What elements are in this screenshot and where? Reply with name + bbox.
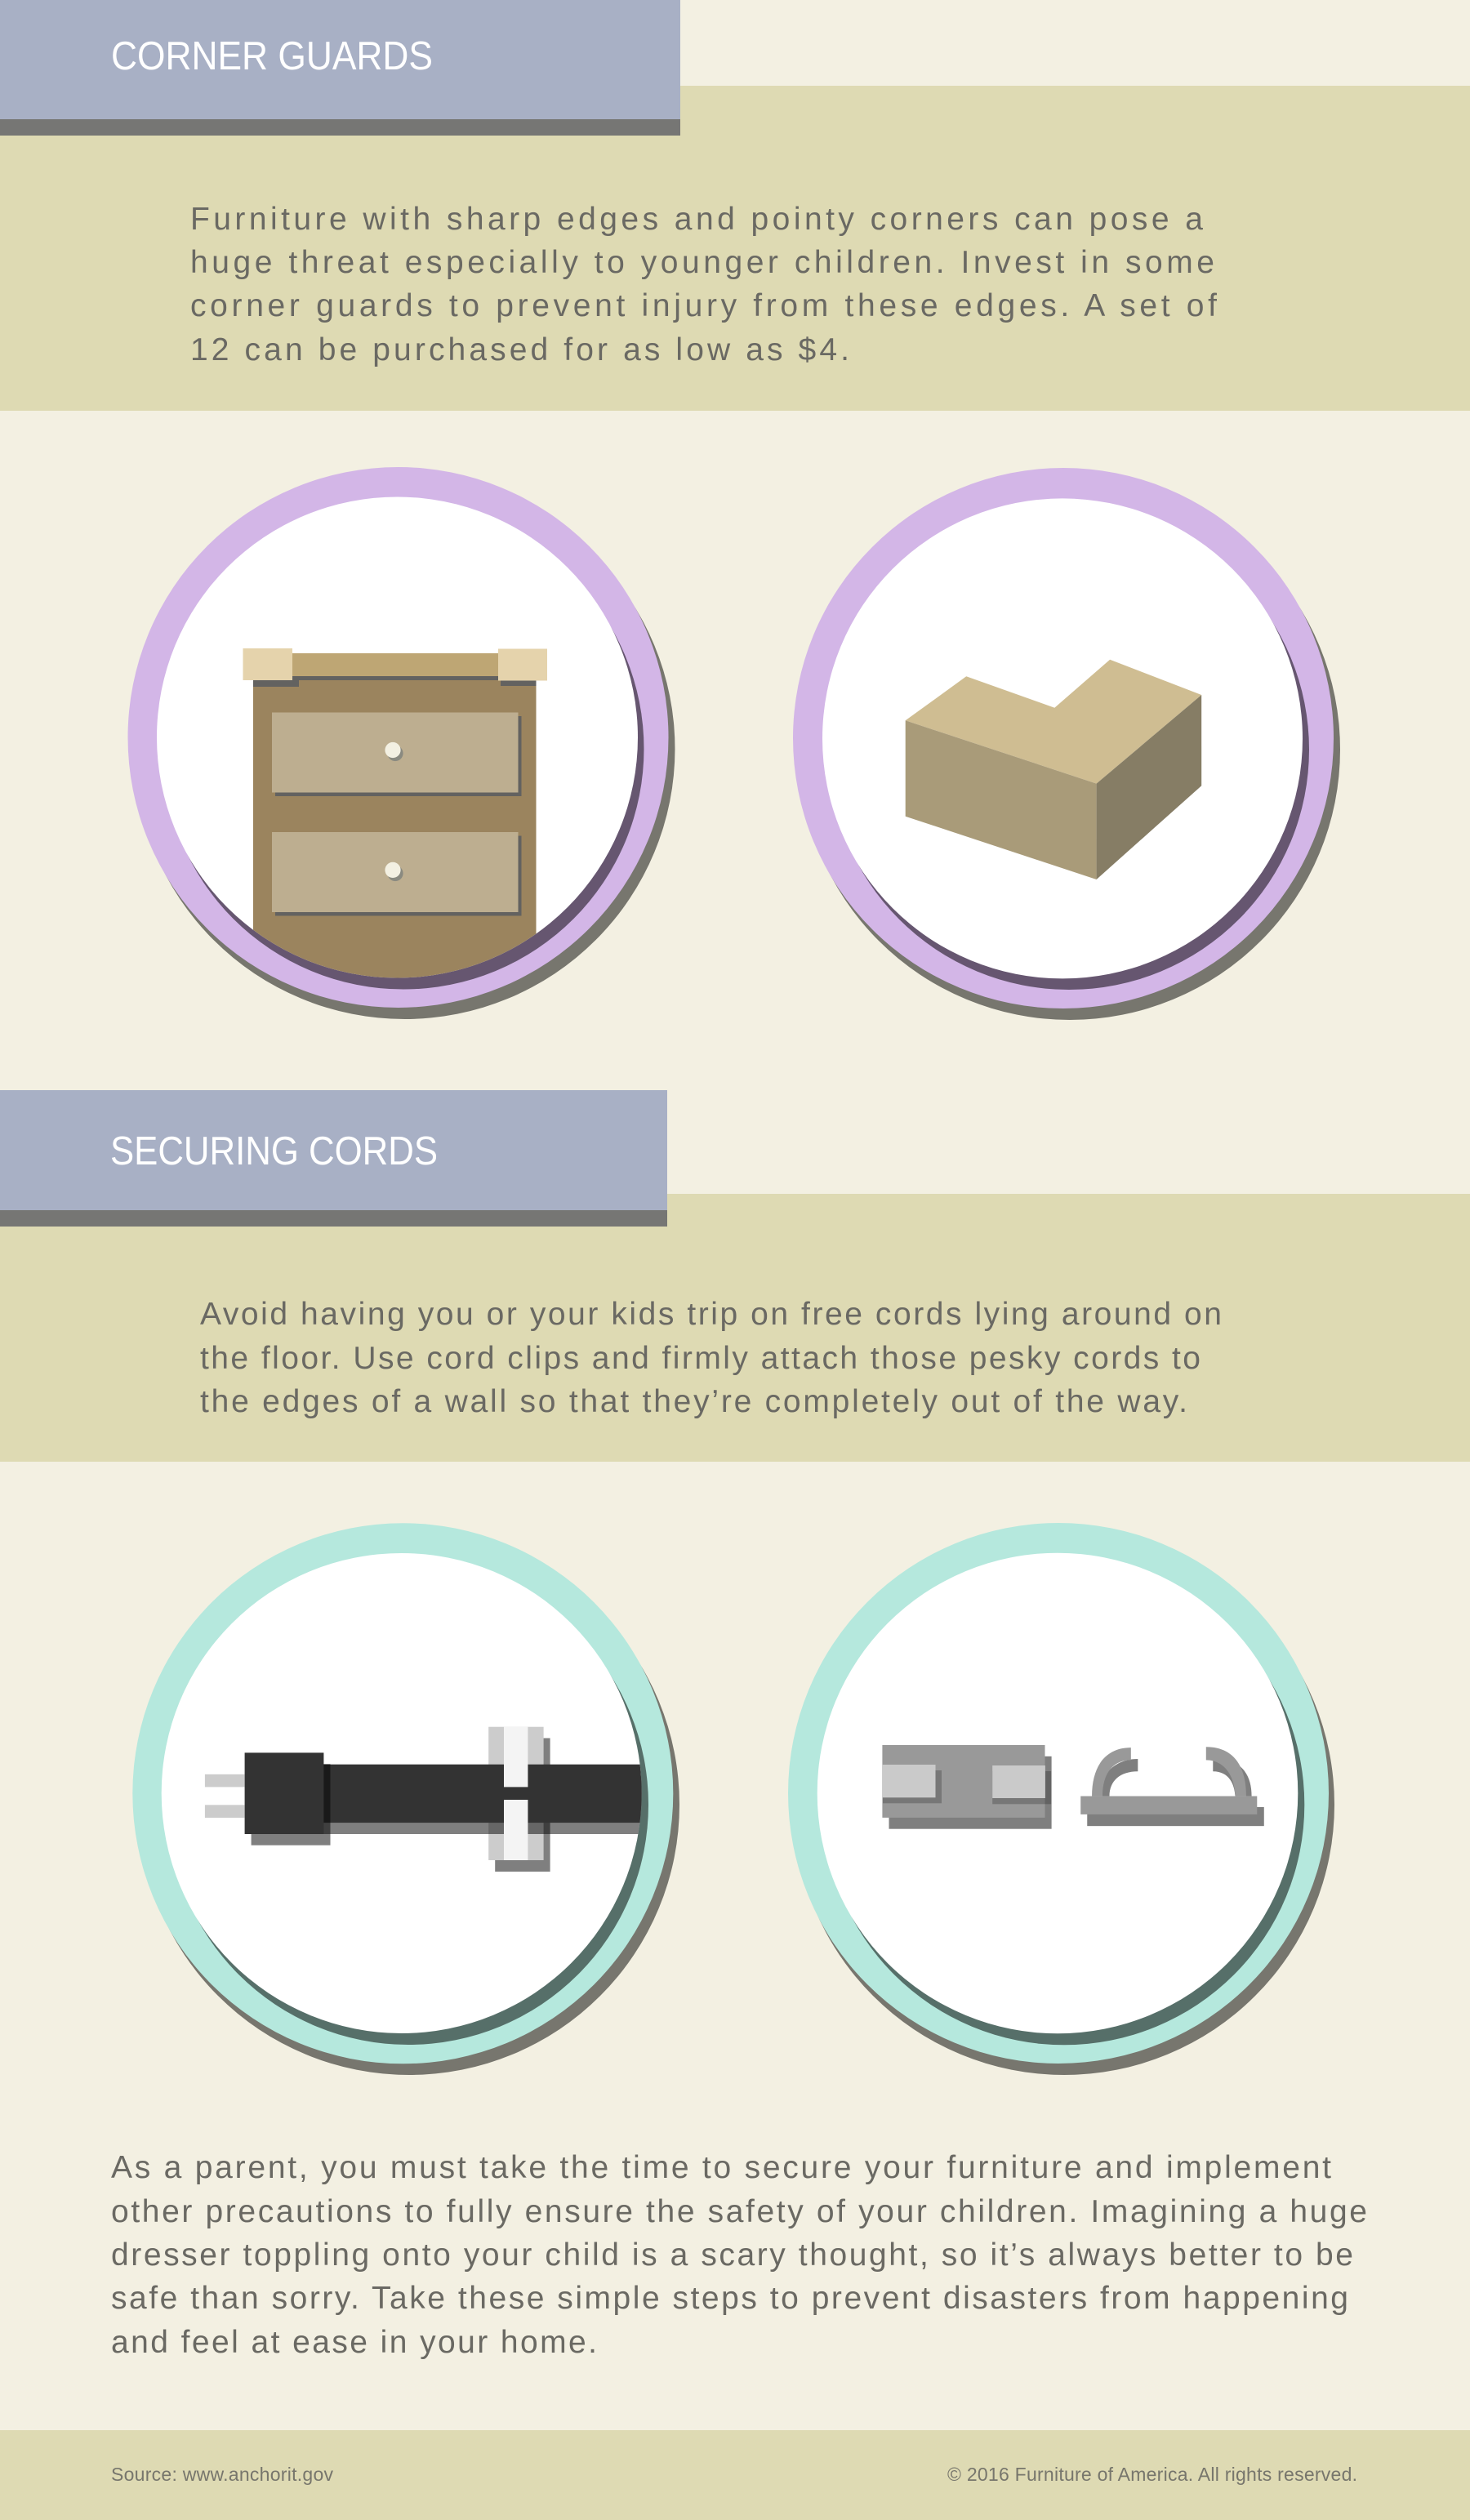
- icon: left corner guard: [243, 648, 292, 680]
- icon: dresser: [243, 648, 547, 991]
- copyright note: © 2016 Furniture of America. All rights reserved.: [947, 2464, 1357, 2485]
- circle: cord clips: [788, 1523, 1334, 2075]
- closing paragraph: other precautions to fully ensure the safety of your children. Imagining a huge: [111, 2194, 1367, 2229]
- closing paragraph: and feel at ease in your home.: [111, 2325, 597, 2360]
- source note: Source: www.anchorit.gov: [111, 2464, 333, 2485]
- body text: securing cords: the edges of a wall so that they’re completely out of the way.: [200, 1384, 1187, 1419]
- heading: securing cords: [0, 1090, 667, 1227]
- heading: securing cords: SECURING CORDS: [110, 1129, 438, 1173]
- body text: securing cords: the floor. Use cord clips and firmly attach those pesky cords to: [200, 1341, 1200, 1376]
- body text: corner guards: huge threat especially to younger children. Invest in some: [190, 245, 1214, 280]
- circle: corner guard close-up: [793, 468, 1340, 1020]
- closing paragraph: As a parent, you must take the time to secure your furniture and implement: [111, 2150, 1331, 2185]
- icon: right corner guard: [498, 648, 547, 681]
- heading: corner guards: CORNER GUARDS: [111, 34, 433, 78]
- closing paragraph: dresser toppling onto your child is a scary thought, so it’s always better to be: [111, 2237, 1353, 2273]
- icon: cord clip top view: [882, 1745, 1052, 1829]
- icon: corner guard block: [906, 660, 1201, 879]
- body text: corner guards: [190, 202, 1217, 367]
- panel: securing cords description: [0, 1194, 1470, 1462]
- closing paragraph: safe than sorry. Take these simple steps to prevent disasters from happening: [111, 2281, 1348, 2316]
- icon: cord clip side view: [1080, 1747, 1264, 1826]
- closing paragraph: [111, 2150, 1367, 2360]
- icon: plug with secured cord: [205, 1727, 650, 1872]
- panel: corner guards description: [0, 86, 1470, 411]
- body text: securing cords: [200, 1297, 1222, 1419]
- body text: corner guards: corner guards to prevent injury from these edges. A set of: [190, 288, 1217, 323]
- footer: [0, 2430, 1470, 2520]
- body text: corner guards: Furniture with sharp edges and pointy corners can pose a: [190, 202, 1203, 237]
- circle: dresser with corner guards: [127, 467, 675, 1019]
- heading: corner guards: [0, 0, 680, 136]
- body text: corner guards: 12 can be purchased for as low as $4.: [190, 332, 849, 367]
- circle: plug and cord clip: [132, 1523, 679, 2075]
- body text: securing cords: Avoid having you or your kids trip on free cords lying around on: [200, 1297, 1222, 1332]
